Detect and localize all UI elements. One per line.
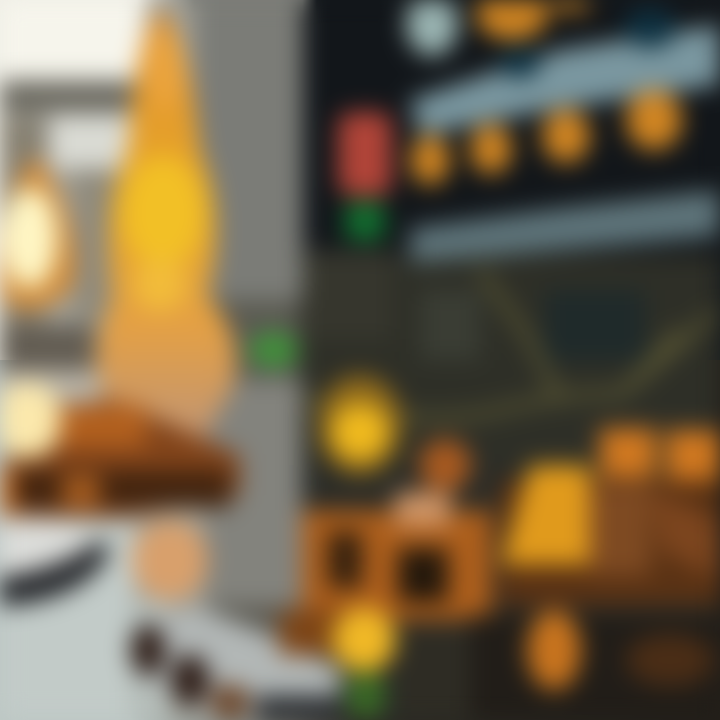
amber lights xyxy=(410,0,682,185)
panel: dark board xyxy=(303,0,720,465)
icon: green marker xyxy=(249,332,299,368)
panel: left window area xyxy=(0,0,205,720)
right gold bars xyxy=(400,428,720,720)
panel: board shelves xyxy=(406,0,720,262)
icon: red light xyxy=(338,112,392,196)
central gold bars xyxy=(280,492,492,719)
chart traces xyxy=(305,270,720,418)
ticker lights xyxy=(338,0,682,240)
gold flame xyxy=(97,8,236,448)
panel: grey column xyxy=(195,0,305,720)
center gold glow xyxy=(318,375,471,491)
icon: green light xyxy=(345,202,385,240)
left flame glow xyxy=(0,155,76,310)
bottom white and dark blocks xyxy=(130,608,340,720)
left gold bars xyxy=(0,382,240,600)
dark tray left xyxy=(0,520,110,606)
